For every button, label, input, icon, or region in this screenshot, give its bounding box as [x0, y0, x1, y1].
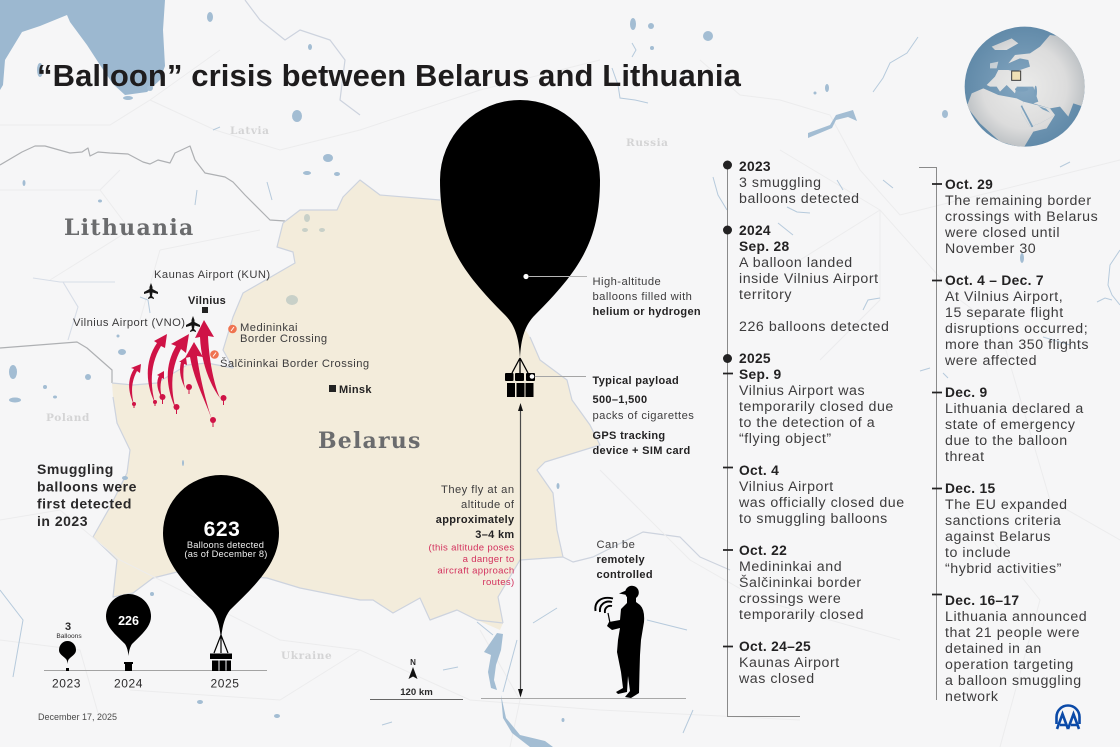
year labels [52, 676, 240, 690]
balloon 2025: Balloons detected [187, 540, 264, 550]
timeline: left column: Oct. 4 [739, 463, 779, 478]
icon: person with remote [595, 586, 644, 698]
callout: payload: 500–1,500 [592, 394, 647, 406]
timeline: right column: Oct. 4 – Dec. 7 [945, 273, 1044, 288]
timeline: right column: crossings with Belarus [945, 209, 1098, 225]
timeline: left column: Oct. 22 [739, 543, 787, 558]
timeline: left column: Oct. 24–25 [739, 639, 811, 654]
icon: Kaunas airplane [144, 283, 158, 299]
timeline: right column: were closed until [944, 225, 1060, 241]
labels: neighbouring countries: Latvia [230, 125, 270, 137]
timeline: left column: to the detection of a [739, 415, 875, 431]
timeline: left column: 3 smuggling [739, 175, 822, 191]
logo: AA [1056, 706, 1080, 729]
text: smuggling balloons first detected: first detected [37, 496, 132, 512]
icon: Salcininkai crossing [210, 350, 219, 359]
timeline: right column: Lithuania declared a [945, 401, 1084, 417]
timeline: right column: sanctions criteria [945, 513, 1061, 529]
balloon 2023: 3 [65, 621, 71, 633]
timeline: right column: state of emergency [945, 417, 1076, 433]
country borders [0, 146, 285, 383]
icon: Medininkai crossing [228, 325, 237, 333]
altitude text: aircraft approach [437, 566, 514, 576]
globe locator [965, 27, 1085, 148]
map: places [73, 269, 372, 396]
date: December 17, 2025 [38, 712, 117, 722]
balloon 2023: Balloons [56, 633, 82, 640]
timeline: right column: disruptions occurred; [945, 321, 1088, 337]
timeline: left column: 2024 [739, 223, 771, 238]
year labels: 2025 [210, 676, 240, 690]
remote control text: remotely [596, 554, 645, 566]
remote control text: Can be [596, 539, 635, 551]
balloon markers [132, 384, 226, 427]
timeline: right column: against Belarus [945, 529, 1051, 545]
timeline: right column: were affected [944, 353, 1037, 369]
altitude text: altitude of [461, 499, 515, 511]
timeline: left column: Sep. 28 [739, 239, 789, 254]
balloon 2025: 623 [204, 518, 240, 541]
timeline: left column: Šalčininkai border [739, 574, 862, 591]
timeline: left column: temporarily closed due [739, 399, 894, 415]
callout: payload: Typical payload [592, 375, 679, 387]
altitude text: They fly at an [441, 484, 514, 496]
labels: neighbouring countries: Poland [46, 412, 90, 424]
scale bar and north arrow: N [410, 658, 416, 667]
callout: balloon gas [523, 274, 701, 318]
balloon route arrows [129, 320, 226, 427]
timeline: right column: “hybrid activities” [945, 561, 1062, 577]
timeline: left column: balloons detected [739, 191, 860, 207]
timeline: left column: 226 balloons detected [739, 319, 889, 335]
map: places: Medininkai [240, 322, 298, 334]
timeline: right column: a balloon smuggling [945, 673, 1082, 689]
timeline: left column: was officially closed due [738, 495, 905, 511]
timeline: right column: At Vilnius Airport, [945, 289, 1063, 305]
callout: balloon gas: helium or hydrogen [592, 306, 701, 318]
timeline: right column: more than 350 flights [945, 337, 1089, 353]
labels: neighbouring countries: Russia [626, 137, 669, 149]
timeline: right column: due to the balloon [945, 433, 1068, 449]
timeline: left column: A balloon landed [739, 255, 853, 271]
timeline: left column [723, 159, 905, 716]
balloon 2024: 226 [118, 614, 139, 628]
callout: payload: packs of cigarettes [592, 410, 694, 422]
callout: balloon gas: balloons filled with [592, 291, 692, 303]
timeline: right column: 15 separate flight [945, 305, 1064, 321]
timeline: left column: temporarily closed [739, 607, 864, 623]
timeline: left column: was closed [738, 671, 815, 687]
altitude text: (this altitude poses [428, 542, 514, 554]
timeline: right column: to include [945, 545, 1011, 561]
labels: neighbouring countries: Ukraine [281, 650, 332, 662]
timeline: left column: Medininkai and [739, 559, 842, 575]
altitude text: a danger to [463, 554, 514, 565]
timeline: right column: The EU expanded [945, 497, 1068, 513]
timeline: left column: territory [739, 287, 792, 303]
balloon 2023 [56, 621, 82, 671]
scale bar and north arrow [370, 658, 463, 700]
timeline: right column [919, 168, 1098, 705]
timeline: left column: inside Vilnius Airport [739, 271, 879, 287]
timeline: left column: Vilnius Airport was [739, 383, 865, 399]
timeline: right column: Dec. 15 [945, 481, 995, 496]
callout: payload: GPS tracking [592, 430, 665, 442]
timeline: left column: 2025 [739, 351, 771, 366]
timeline: right column: The remaining border [945, 193, 1092, 209]
text: smuggling balloons first detected: balloons were [37, 478, 137, 494]
timeline: left column: Sep. 9 [739, 367, 781, 382]
timeline: left column: Kaunas Airport [739, 655, 840, 671]
timeline: left column: Vilnius Airport [739, 479, 834, 495]
icon: Vilnius airplane [186, 316, 200, 332]
remote control text: controlled [596, 569, 653, 581]
scale bar and north arrow: 120 km [400, 687, 433, 698]
sea: Baltic [0, 0, 165, 95]
map: places: Minsk [339, 384, 372, 396]
map: places: Border Crossing [240, 333, 328, 345]
main balloon [440, 100, 600, 397]
timeline: left column: crossings were [739, 591, 841, 607]
map labels: Belarus [318, 428, 422, 454]
timeline: right column: Oct. 29 [945, 177, 993, 192]
Belarus territory [93, 180, 600, 630]
balloon 2025: (as of December 8) [184, 549, 268, 559]
timeline: right column: that 21 people were [945, 625, 1080, 641]
timeline: right column: detained in an [945, 641, 1042, 657]
map: places: Vilnius [188, 295, 226, 307]
timeline: right column: network [945, 689, 999, 705]
map labels: Lithuania [64, 215, 195, 241]
icon: signal waves [595, 598, 613, 613]
callout: payload [529, 374, 694, 457]
text: smuggling balloons first detected: Smuggling [37, 461, 114, 477]
altitude text: routes) [483, 577, 514, 588]
callout: payload: device + SIM card [592, 445, 691, 457]
altitude text: 3–4 km [475, 529, 514, 541]
chart: balloons per year [44, 475, 279, 690]
year labels: 2024 [114, 676, 143, 690]
text: smuggling balloons first detected: in 2023 [37, 513, 88, 529]
callout: balloon gas: High-altitude [592, 276, 661, 288]
altitude text: approximately [436, 514, 515, 526]
timeline: left column: “flying object” [739, 431, 832, 447]
map: places: Vilnius Airport (VNO) [73, 317, 185, 329]
map labels [64, 215, 422, 454]
payload [505, 373, 535, 397]
timeline: right column: November 30 [945, 241, 1036, 257]
remote control text [596, 539, 653, 581]
title: “Balloon” crisis between Belarus and Lithuania [37, 58, 742, 93]
altitude arrow [428, 403, 686, 698]
timeline: right column: Dec. 9 [945, 385, 987, 400]
map: places: Kaunas Airport (KUN) [154, 269, 271, 281]
map: places: Šalčininkai Border Crossing [220, 357, 370, 370]
timeline: left column: 2023 [739, 159, 771, 174]
year labels: 2023 [52, 676, 81, 690]
timeline: right column: operation targeting [945, 657, 1074, 673]
timeline: right column: Lithuania announced [945, 609, 1087, 625]
labels: neighbouring countries [46, 125, 669, 662]
balloon 2024 [106, 594, 151, 671]
balloon 2025 [163, 475, 279, 671]
timeline: left column: to smuggling balloons [739, 511, 888, 527]
locator box [1012, 71, 1021, 80]
altitude text [428, 484, 515, 588]
timeline: right column: Dec. 16–17 [945, 593, 1019, 608]
timeline: right column: threat [945, 449, 985, 465]
